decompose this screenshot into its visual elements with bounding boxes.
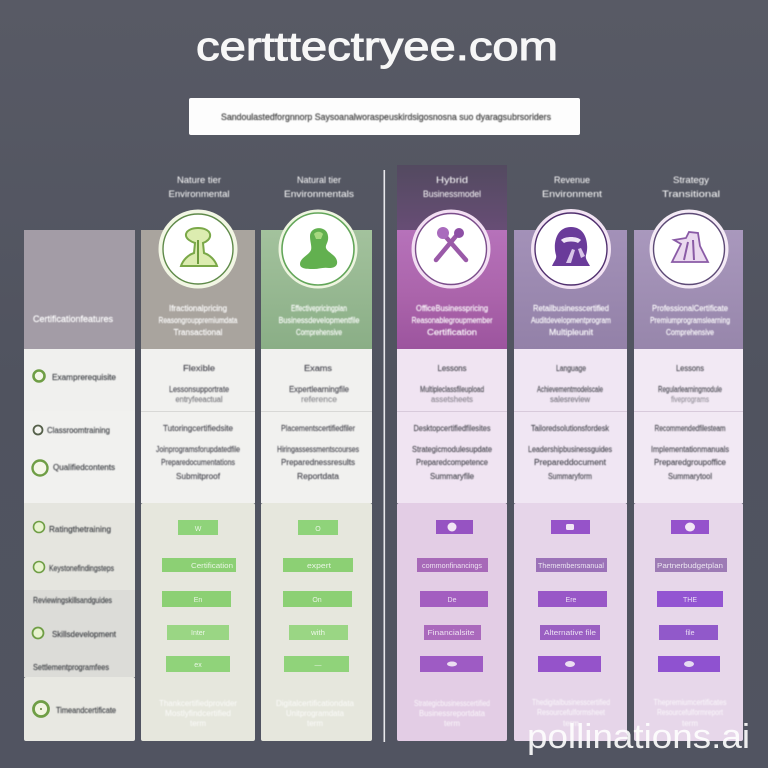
row label 4 [34,522,111,534]
row label 9 [34,702,116,716]
bar: value d: file [686,630,695,637]
description [650,304,730,337]
icon: purple badge [650,210,728,288]
row text [156,424,240,481]
bar: value a [551,520,590,534]
row text: Preparednessresults [281,458,355,467]
icon: green badge [278,210,358,288]
footer text: Businessreportdata [419,709,486,718]
row text [412,424,493,481]
row label 3: Qualifiedcontents [53,462,115,472]
bar: value d: Financialsite [428,630,475,637]
center divider [384,170,385,742]
bar: value c: De [448,597,457,604]
column heading [168,175,230,200]
column heading: Strategy [673,175,709,186]
row text: Strategicmodulesupdate [412,445,493,454]
icon: purple badge [531,209,611,289]
column heading: Environmentals [284,189,354,200]
bar: value a [178,520,218,535]
row text: assetsheets [431,395,473,404]
row label 3 [32,460,115,476]
bar: value c: Ere [566,597,577,604]
row text: Placementscertifiedfiler [281,424,355,433]
row label 2: Classroomtraining [47,425,110,435]
bar: value c [283,591,352,607]
column heading [662,175,720,200]
description: Certification [427,328,477,337]
footer text [414,699,490,728]
bar: value e: ex [194,662,202,669]
bar: value d [424,625,481,640]
bar: value b [417,558,488,572]
description [158,304,238,337]
description: Comprehensive [666,328,714,337]
row label 9: Timeandcertificate [56,705,116,715]
description: Transactional [174,328,223,337]
column heading: Businessmodel [423,189,481,200]
footer text: Resourcefulformsheet [537,708,606,717]
row label 1: Examprerequisite [52,372,116,382]
description [278,304,360,337]
column label: Certificationfeatures [33,314,113,324]
row text: Expertlearningfile [289,385,350,394]
description: ProfessionalCertificate [652,304,729,313]
panel: purple column 5 [634,175,743,741]
footer text: Thepremiumcertificates [654,698,726,707]
row text: Tutoringcertifiedsite [163,424,234,433]
bar: value c: En [194,597,202,604]
row text: Multipleclassfileupload [420,385,484,394]
bar: value b: expert [307,563,331,570]
column heading: Natural tier [297,175,341,186]
column heading: Hybrid [436,175,468,186]
row label 4: Ratingthetraining [49,524,111,534]
row text [651,424,729,481]
bar: value b [162,558,236,572]
icon: green badge [158,210,238,288]
row text: Regularlearningmodule [658,385,722,394]
description: Retailbusinesscertified [533,304,609,313]
bar: value c [538,591,607,607]
row text: Lessonsupportrate [169,385,229,394]
footer text: Thankcertifiedprovider [159,699,237,708]
panel: green column 1 [141,175,255,741]
bar: value a [671,520,709,534]
panel: purple column 3 [397,165,507,741]
panel: feature label column [24,230,135,741]
column heading [423,175,481,200]
bar: value a: O [315,526,321,533]
column heading [542,175,602,200]
row text: Summaryform [548,472,592,481]
row label 1 [34,370,116,382]
watermark: pollinations.ai [527,718,750,756]
footer text [654,698,726,728]
column heading: Environmental [168,189,230,200]
row text: entryfeeactual [176,395,223,404]
bar: value c [420,591,488,607]
row text: Leadershipbusinessguides [528,445,612,454]
bar: value b: commonfinancings [422,563,483,570]
bar: value c [162,591,231,607]
bar: value e [658,656,720,672]
footer text [532,698,610,728]
bar: value b [283,558,353,572]
row text [658,364,722,404]
row text: Prepareddocument [534,458,607,467]
description: Reasongrouppremiumdata [158,316,238,325]
row text: Desktopcertifiedfilesites [414,424,490,433]
row label 7 [32,628,117,639]
row text: Achievementmodelscale [537,385,603,394]
row text: Preparedcompetence [416,458,489,467]
bar: value d: Alternative file [544,630,596,637]
row text: reference [301,395,338,404]
description [412,304,493,337]
column heading: Nature tier [177,175,221,186]
description: Effectivepricingplan [291,304,347,313]
row text [537,364,603,404]
column heading [284,175,354,200]
bar: value e [284,656,349,672]
description: Businessdevelopmentfile [278,316,360,325]
description: Multipleunit [549,328,594,337]
row text: Reportdata [297,472,340,481]
footer text: Thedigitalbusinesscertified [532,698,610,707]
row label 8: Settlementprogramfees [33,662,109,672]
row text: Lessons [676,364,704,373]
bar: value b [536,558,607,572]
footer text: Unitprogramdata [286,709,345,718]
description: OfficeBusinesspricing [416,304,488,313]
subtitle box: Sandoulastedforgnnorp Saysoanalworaspeuskirdsigosnosna suo dyaragsubrsoriders [221,112,551,122]
column heading: Transitional [662,189,720,200]
row text: Recommendedfilesteam [654,424,726,433]
row text: Language [556,364,586,373]
row text: salesreview [550,395,590,404]
bar: value c [657,591,723,607]
row text [420,364,484,404]
bar: value d: Inter [191,630,206,637]
row text [289,364,350,404]
description: Ifractionalpricing [169,304,227,313]
bar: value d [289,625,348,640]
row text: Joinprogramsforupdatedfile [156,445,240,454]
bar: value a: W [195,526,202,533]
row text: Tailoredsolutionsfordesk [531,424,610,433]
row text: Flexible [183,364,216,373]
description: Auditdevelopmentprogram [531,316,611,325]
bar: value b: Partnerbudgetplan [657,563,723,570]
row label 5: Keystonefindingsteps [49,563,114,573]
footer text: Digitalcertificationdata [276,699,355,708]
row text [169,364,229,404]
description [531,304,611,337]
panel: purple column 4 [514,175,627,741]
description: Reasonablegroupmember [412,316,493,325]
footer text: Mostlyfindcertified [165,709,231,718]
title: certttectryee.com [196,25,558,69]
description: Premiumprogramslearning [650,316,730,325]
footer text: term [563,719,579,728]
row label 6: Reviewingskillsandguides [33,595,112,605]
bar: value d [659,625,718,640]
row label 5 [34,562,114,573]
bar: value a [298,520,338,535]
bar: value b [655,558,727,572]
bar: value e [538,656,601,672]
row text [528,424,612,481]
row text: Preparedocumentations [161,458,235,467]
row text: Hiringassessmentscourses [277,445,359,454]
row text: Lessons [438,364,466,373]
bar: value d: with [310,630,325,637]
row text [277,424,359,481]
column heading: Revenue [554,175,590,186]
row text: fiveprograms [671,395,709,404]
bar: value e [420,656,483,672]
row text: Exams [304,364,332,373]
row text: Summarytool [668,472,712,481]
subtitle box [189,98,580,135]
column heading: Environment [542,189,602,200]
bar: value d [167,625,229,640]
row text: Implementationmanuals [651,445,729,454]
bar: value a [436,520,473,534]
footer text: term [190,719,206,728]
footer text [159,699,237,728]
footer text: term [682,719,698,728]
footer text: Strategicbusinesscertified [414,699,490,708]
footer text [276,699,355,728]
row label 7: Skillsdevelopment [52,629,117,639]
bar: value b: Themembersmanual [538,563,604,570]
row text: Summaryfile [430,472,475,481]
bar: value e [166,656,230,672]
description: Comprehensive [296,328,342,337]
footer text: term [444,719,460,728]
panel: green column 2 [261,175,372,741]
bar: value e: — [314,662,322,669]
bar: value c: THE [683,597,697,604]
row text: Submitproof [176,472,221,481]
row text: Preparedgroupoffice [654,458,727,467]
bar: value c: On [312,597,322,604]
footer text: Resourcefulformreport [657,708,724,717]
bar: value d [540,625,600,640]
footer text: term [307,719,323,728]
bar: value b: Certification [191,563,233,570]
icon: purple badge [412,210,490,288]
